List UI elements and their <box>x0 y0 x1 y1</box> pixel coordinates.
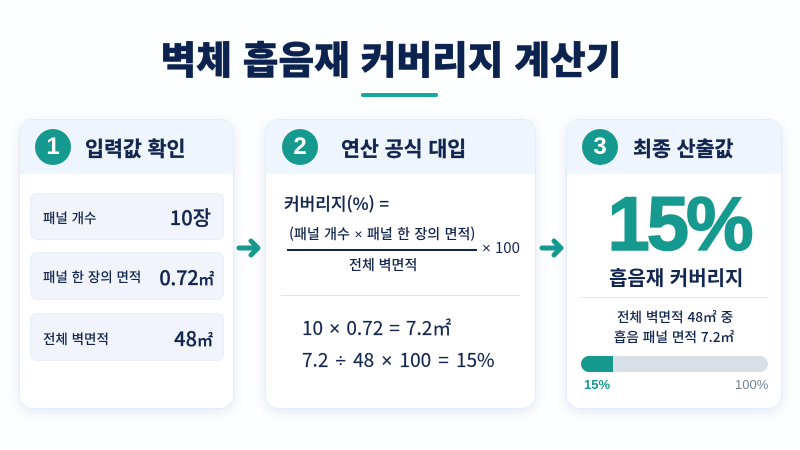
row: wall area <box>30 313 224 361</box>
calculation line 1: 10 × 0.72 = 7.2㎡ <box>302 314 451 341</box>
card 2 background <box>265 119 536 409</box>
label: panel count: 패널 개수 <box>43 207 96 227</box>
fraction denominator: 전체 벽면적 <box>349 255 417 275</box>
heading: formula substitution: 연산 공식 대입 <box>341 132 466 162</box>
heading: input check: 입력값 확인 <box>85 132 186 162</box>
progress bar <box>581 356 768 372</box>
title underline <box>361 93 438 97</box>
fraction line <box>287 249 477 250</box>
panel: formula <box>262 119 539 415</box>
value: wall area: 48㎡ <box>174 323 213 352</box>
step number 2 <box>282 129 318 165</box>
step number 2: 2 <box>293 133 307 160</box>
step number 1: 1 <box>46 133 60 160</box>
summary line 2: 흡음 패널 면적 7.2㎡ <box>614 326 734 346</box>
row: panel area <box>30 252 224 300</box>
label: wall area: 전체 벽면적 <box>43 328 109 348</box>
result label: 흡음재 커버리지 <box>609 262 743 291</box>
panel: final result <box>563 119 785 415</box>
label: panel area: 패널 한 장의 면적 <box>43 266 141 286</box>
formula label: 커버리지(%) = <box>284 190 389 215</box>
panel: input values <box>16 119 237 415</box>
progress label 100%: 100% <box>735 377 768 392</box>
card 1 background <box>19 119 234 409</box>
divider <box>281 295 520 296</box>
divider <box>581 297 768 298</box>
fraction numerator: (패널 개수 × 패널 한 장의 면적) <box>289 224 475 244</box>
big percentage: 15% <box>607 182 751 267</box>
summary line 1: 전체 벽면적 48㎡ 중 <box>617 306 733 326</box>
heading: final value: 최종 산출값 <box>633 132 734 162</box>
arrow: step 2 to 3 <box>540 238 564 258</box>
arrow: step 1 to 2 <box>236 238 260 258</box>
step number 3 <box>582 129 618 165</box>
title: 벽체 흡음재 커버리지 계산기 <box>161 30 621 86</box>
step number 3: 3 <box>593 133 607 160</box>
card 3 background <box>566 119 782 409</box>
row: panel count <box>30 193 224 240</box>
value: panel area: 0.72㎡ <box>159 262 214 291</box>
calculation line 2: 7.2 ÷ 48 × 100 = 15% <box>302 346 495 373</box>
value: panel count: 10장 <box>170 202 211 231</box>
progress label 15%: 15% <box>584 377 610 392</box>
times 100: × 100 <box>482 237 520 258</box>
step number 1 <box>35 129 71 165</box>
progress fill <box>581 356 613 372</box>
